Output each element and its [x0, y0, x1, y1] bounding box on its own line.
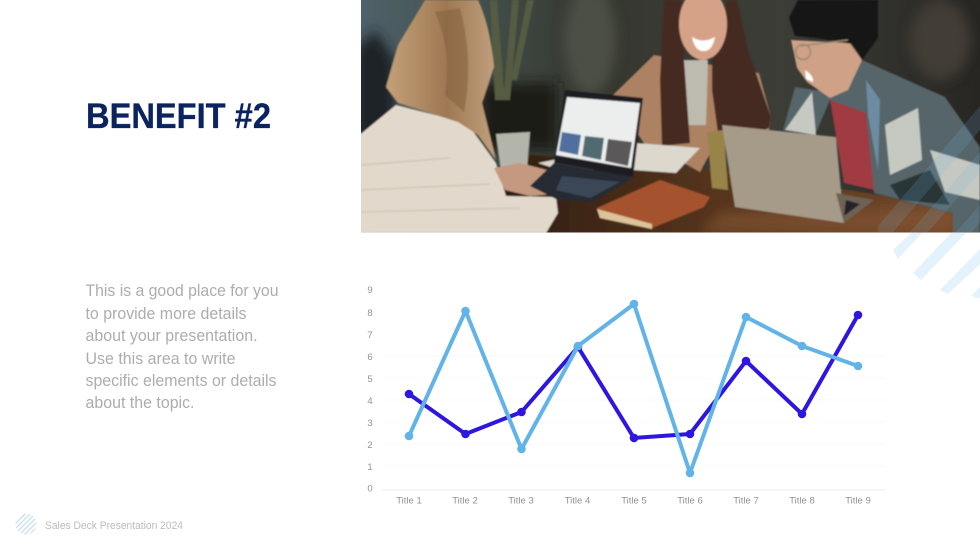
y axis labels: 7: [367, 330, 373, 341]
y axis labels: [367, 285, 373, 494]
x axis labels: [396, 496, 871, 506]
silver laptop: [722, 125, 844, 223]
y axis labels: 4: [367, 396, 373, 407]
book: [597, 180, 710, 228]
y axis labels: 1: [367, 462, 373, 473]
right man face and hair: [791, 40, 862, 98]
x axis labels: Title 5: [621, 496, 647, 506]
y axis labels: 9: [367, 285, 373, 296]
plant: [490, 0, 534, 100]
notebook behind: [538, 143, 700, 173]
left woman sweater: [350, 105, 558, 233]
middle woman: [613, 55, 771, 172]
gridlines: [382, 356, 885, 466]
body text: This is a good place for you: [86, 281, 278, 300]
x axis labels: Title 6: [677, 496, 703, 506]
y axis labels: 3: [367, 418, 373, 429]
footer text: Sales Deck Presentation 2024: [45, 520, 183, 532]
y axis labels: 0: [367, 484, 373, 494]
glasses on the table: [496, 132, 530, 172]
dark series: [405, 311, 862, 442]
x axis labels: Title 4: [565, 496, 590, 506]
line chart: [367, 285, 886, 506]
table: [500, 155, 960, 233]
body text: specific elements or details: [86, 371, 276, 390]
x axis labels: Title 2: [452, 496, 478, 506]
icon: striped circle: [16, 514, 36, 534]
y axis labels: 8: [367, 308, 373, 319]
laptop left: [554, 90, 643, 177]
x axis labels: Title 7: [733, 496, 759, 506]
y axis labels: 5: [367, 374, 373, 385]
body text: to provide more details: [86, 304, 246, 323]
body text: [86, 281, 278, 412]
title: BENEFIT #2: [86, 97, 271, 136]
y axis labels: 2: [367, 440, 373, 451]
body text: about the topic.: [86, 393, 194, 412]
y axis labels: 6: [367, 352, 373, 363]
wall texture: [361, 26, 400, 133]
body text: Use this area to write: [86, 349, 236, 368]
decorative stripes: [893, 233, 980, 298]
x axis labels: Title 1: [396, 496, 422, 506]
x axis labels: Title 3: [508, 496, 534, 506]
photo: three colleagues laughing around laptops: [350, 0, 980, 233]
x axis labels: Title 8: [789, 496, 815, 506]
left woman hand: [494, 162, 548, 197]
light series: [405, 300, 862, 477]
left woman hair: [386, 0, 496, 160]
x axis labels: Title 9: [845, 496, 871, 506]
body text: about your presentation.: [86, 326, 258, 345]
photo stripes overlay: [878, 106, 980, 232]
right man jacket: [783, 60, 980, 233]
